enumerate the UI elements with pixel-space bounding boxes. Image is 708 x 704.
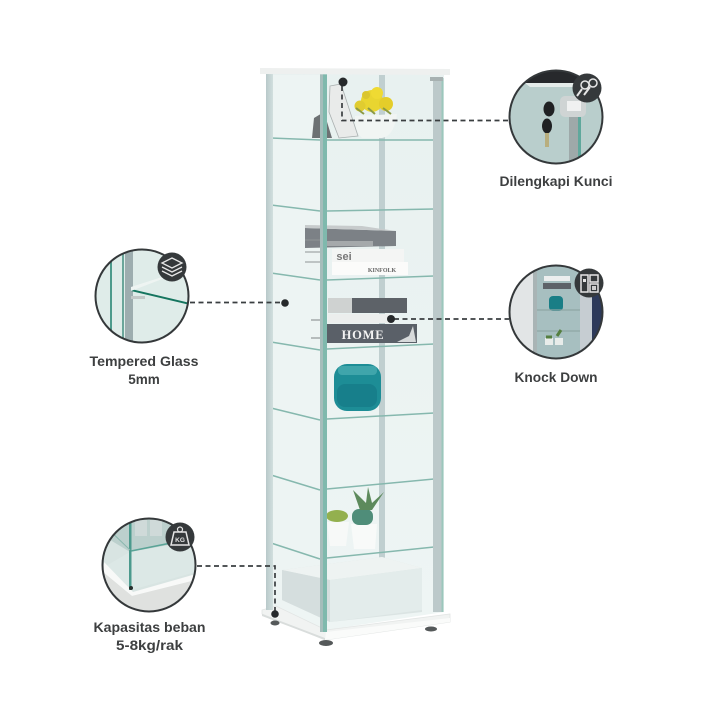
cabinet posts [266, 74, 444, 632]
callout: tempered glass pointer [190, 299, 289, 307]
glass shelves [271, 138, 434, 559]
glass circle border [96, 250, 188, 342]
knock down photo [510, 266, 602, 358]
label: Tempered Glass 5mm: Tempered Glass [90, 354, 198, 369]
lock circle border [510, 70, 602, 164]
glass photo [95, 249, 190, 343]
callout: lock pointer [338, 78, 509, 120]
potted plants [326, 487, 384, 549]
picture frame on top shelf [312, 84, 358, 138]
top plate [260, 68, 450, 75]
stack of books lower [311, 298, 417, 343]
label: Kapasitas beban 5-8kg/rak [94, 620, 206, 653]
panel: capacity detail [94, 518, 206, 653]
label: Knock Down: Knock Down [514, 370, 598, 385]
white storage box on base [282, 557, 422, 622]
glass cabinet [260, 68, 450, 646]
panel: tempered glass detail [90, 249, 198, 387]
lock photo [510, 72, 602, 162]
teal vase [334, 364, 381, 411]
icon: keys badge [572, 74, 602, 102]
panel: lock detail [500, 69, 612, 189]
stack of books upper [305, 225, 408, 275]
label: Tempered Glass 5mm: 5mm [128, 372, 160, 387]
capacity circle border [102, 518, 196, 612]
label: Tempered Glass 5mm [90, 354, 198, 387]
base plate [262, 606, 450, 646]
stack of books upper: sei [336, 251, 352, 263]
label: Kapasitas beban 5-8kg/rak: Kapasitas beban [94, 620, 206, 635]
icon: layers badge [158, 252, 186, 282]
label: Kapasitas beban 5-8kg/rak: 5-8kg/rak [116, 638, 184, 653]
panel: knock down detail [508, 264, 606, 385]
capacity photo [102, 518, 196, 612]
icon: weight badge: KG [175, 537, 185, 544]
stack of books lower: HOME [342, 328, 384, 342]
label: Dilengkapi Kunci: Dilengkapi Kunci [500, 174, 612, 189]
callout: capacity pointer [197, 566, 279, 618]
callout: knock down pointer [387, 315, 509, 323]
stack of books upper: KINFOLK [368, 268, 396, 274]
icon: parts badge [574, 268, 604, 298]
yellow flowers in white vase [354, 87, 397, 138]
knock down circle border [510, 266, 602, 358]
cabinet glass body [266, 74, 444, 630]
